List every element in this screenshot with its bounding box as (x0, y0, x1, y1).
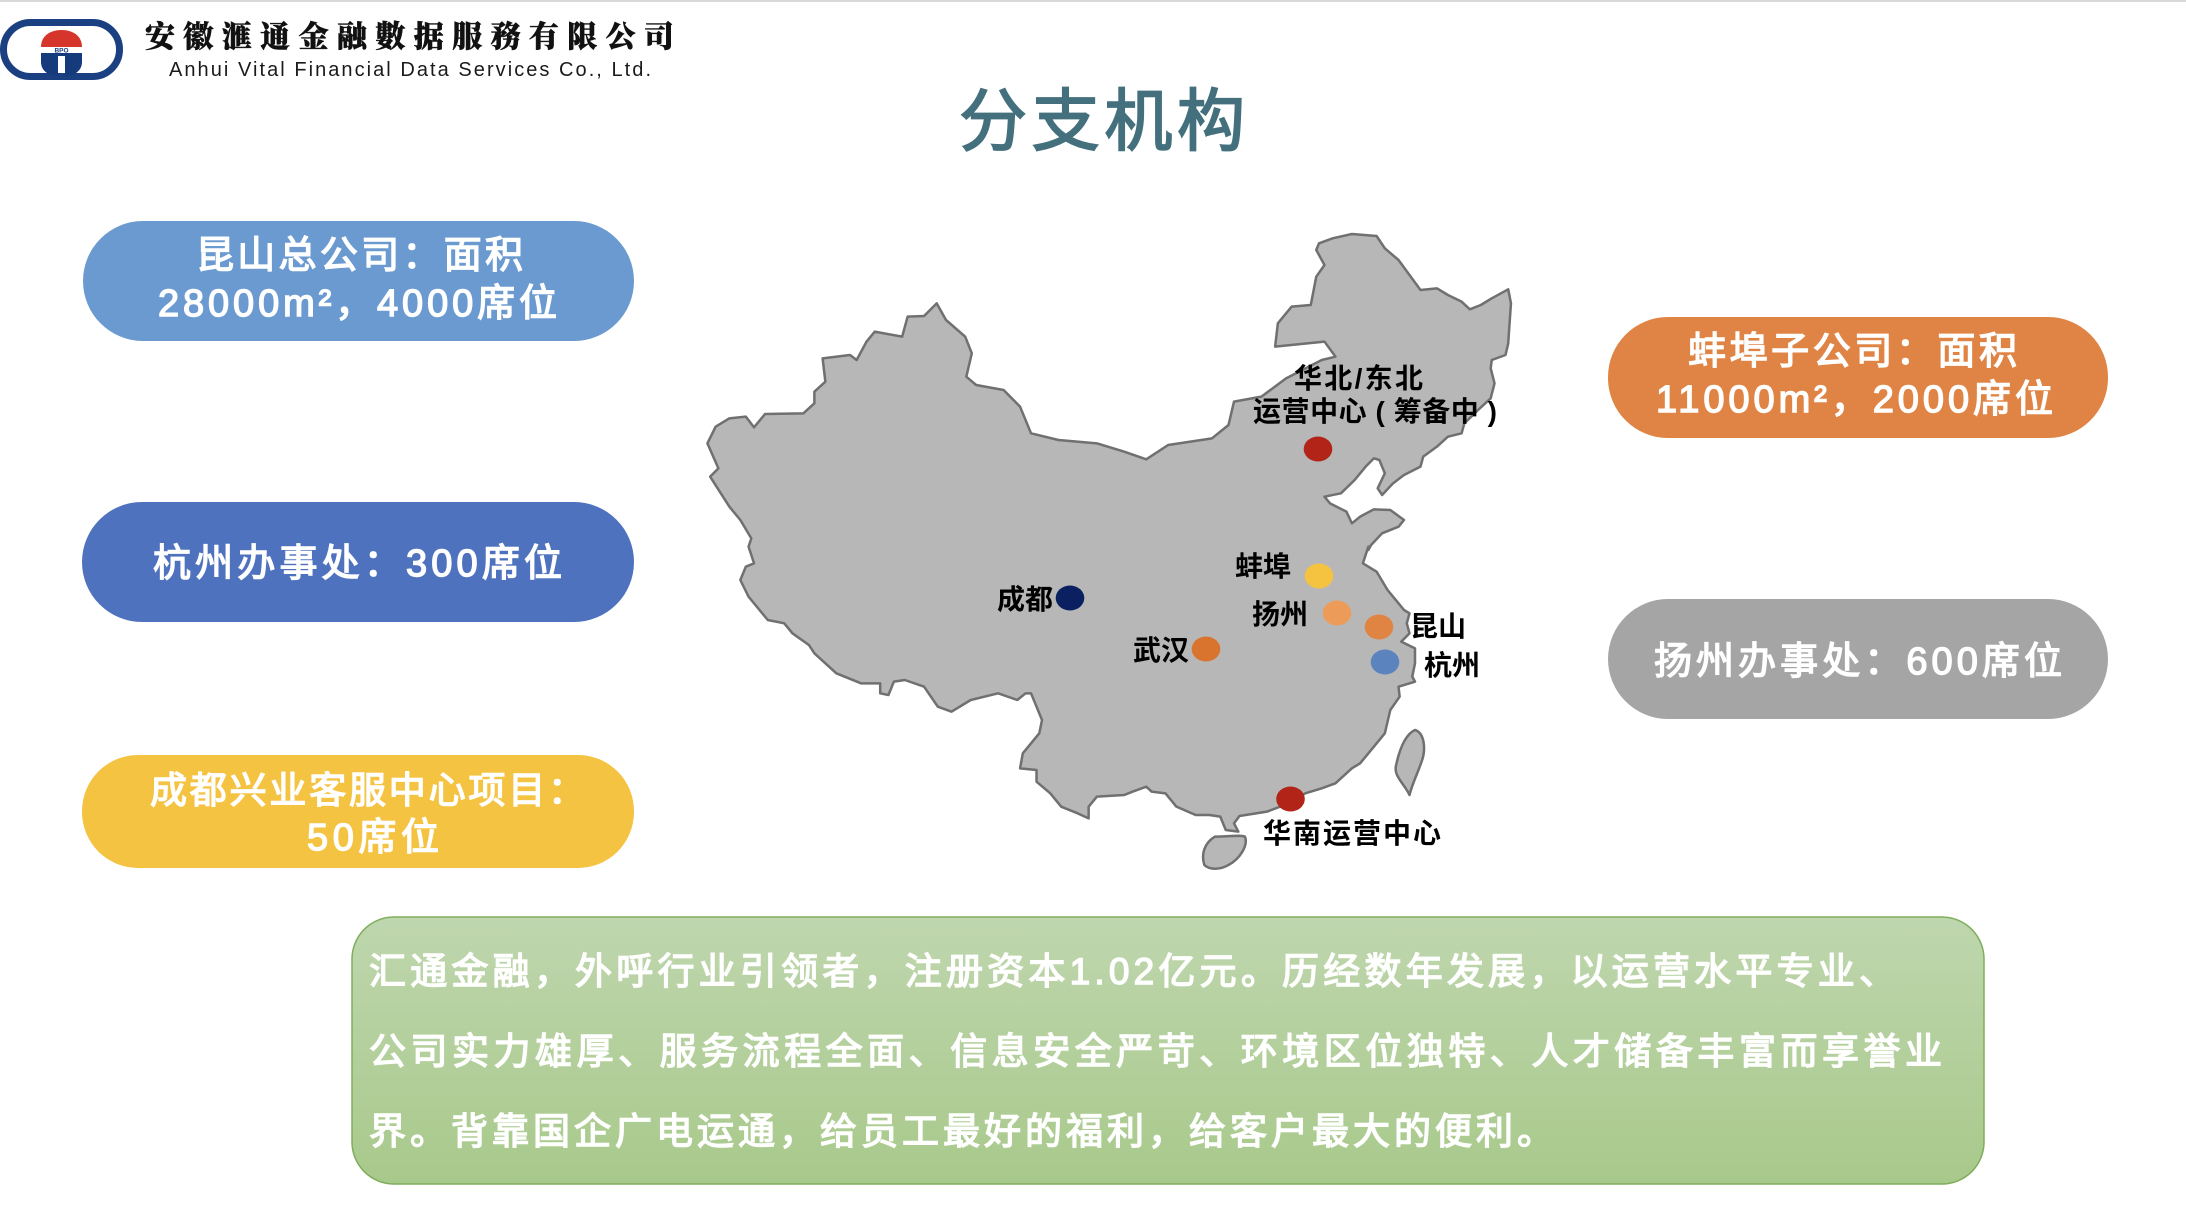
logo icon: BPO (54, 48, 69, 54)
marker: Kunshan (1365, 611, 1466, 642)
panel: Bengbu subsidiary: 蚌埠子公司：面积 (1688, 331, 2017, 373)
marker: South China center (1263, 786, 1441, 849)
panel: Chengdu project: 成都兴业客服中心项目： (150, 770, 585, 811)
logo icon (4, 22, 120, 76)
panel: Kunshan head office (83, 221, 634, 341)
title: 分支机构 (959, 84, 1245, 160)
marker: Bengbu (1235, 551, 1333, 588)
panel: Chengdu project: 50席位 (307, 817, 439, 859)
company name Chinese: 安徽滙通金融數据服務有限公司 (145, 20, 674, 54)
marker: Chengdu (997, 584, 1084, 615)
marker: Yangzhou: 扬州 (1252, 599, 1308, 630)
panel: Yangzhou office: 扬州办事处：600席位 (1654, 641, 2062, 683)
marker: North/Northeast center: 华北/东北 (1294, 363, 1423, 394)
panel: Chengdu project (82, 755, 634, 868)
panel: Hangzhou office (82, 502, 634, 622)
panel: company summary: 公司实力雄厚、服务流程全面、信息安全严苛、环境区位独特、人才储备丰富而享誉业 (369, 1031, 1942, 1072)
panel: company summary: 界。背靠国企广电运通，给员工最好的福利，给客户最大的便利。 (369, 1111, 1554, 1152)
marker: Hangzhou: 杭州 (1424, 650, 1480, 681)
panel: Kunshan head office: 昆山总公司：面积 (196, 235, 523, 277)
panel: company summary (352, 917, 1984, 1184)
panel: company summary: 汇通金融，外呼行业引领者，注册资本1.02亿元。历经数年发展，以运营水平专业、 (369, 951, 1896, 992)
panel: Hangzhou office: 杭州办事处：300席位 (153, 543, 562, 585)
company name English: Anhui Vital Financial Data Services Co., Ltd. (169, 59, 651, 81)
marker: Chengdu: 成都 (997, 584, 1053, 615)
panel: Bengbu subsidiary (1608, 317, 2108, 438)
marker: Hangzhou (1371, 650, 1480, 681)
marker: North/Northeast center (1253, 363, 1497, 462)
panel: Bengbu subsidiary: 11000m²，2000席位 (1656, 379, 2053, 421)
panel: Yangzhou office (1608, 599, 2108, 719)
marker: Wuhan: 武汉 (1133, 635, 1189, 666)
marker: Kunshan: 昆山 (1410, 611, 1466, 642)
map of China (707, 234, 1511, 869)
marker: Bengbu: 蚌埠 (1235, 551, 1291, 582)
marker: Yangzhou (1252, 599, 1351, 630)
marker: South China center: 华南运营中心 (1263, 818, 1441, 849)
panel: Kunshan head office: 28000m²，4000席位 (158, 283, 557, 325)
marker: Wuhan (1133, 635, 1220, 666)
marker: North/Northeast center: 运营中心 ( 筹备中 ) (1253, 396, 1497, 427)
